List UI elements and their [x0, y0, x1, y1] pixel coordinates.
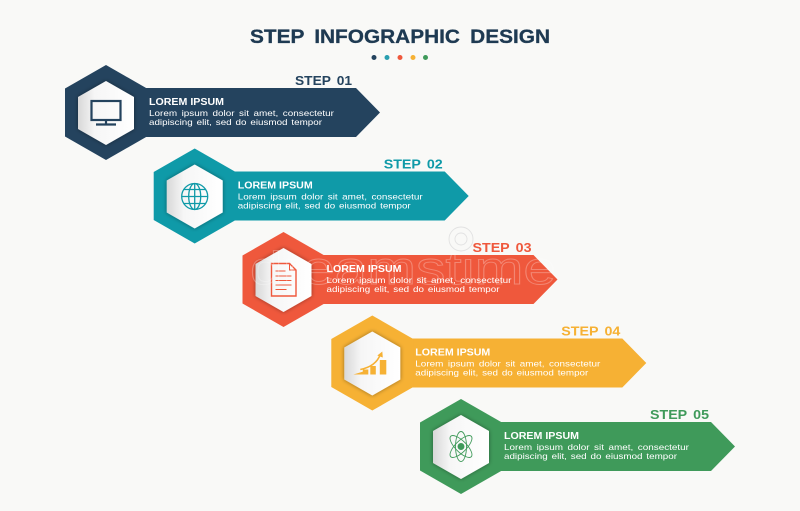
icon: growth chart: [353, 352, 386, 374]
step 5 heading: LOREM IPSUM: [504, 430, 579, 442]
step 2 body: Lorem ipsum dolor sit amet, consectetur: [238, 192, 423, 202]
step 4 banner: [406, 338, 646, 388]
step 4 body: Lorem ipsum dolor sit amet, consectetur: [415, 358, 600, 368]
step 3 body: [326, 275, 512, 294]
step 3 banner: [318, 255, 558, 304]
step 3 heading: LOREM IPSUM: [326, 263, 402, 275]
step 1 body: [149, 108, 334, 127]
step 2 inner hexagon: [167, 164, 223, 228]
step 4 inner hexagon: [344, 332, 400, 396]
step 5 outer hexagon: [420, 399, 502, 494]
step 2 body: adipiscing elit, sed do eiusmod tempor: [238, 200, 411, 210]
step 1 body: adipiscing elit, sed do eiusmod tempor: [149, 117, 322, 127]
step 1 heading: LOREM IPSUM: [149, 96, 224, 108]
step 5 body: [504, 442, 689, 461]
step 1 outer hexagon: [65, 65, 147, 160]
step 4: [331, 316, 646, 410]
step 5 label: STEP 05: [650, 408, 709, 422]
icon: globe: [182, 184, 208, 210]
step 1 body: Lorem ipsum dolor sit amet, consectetur: [149, 108, 334, 118]
title dots: [372, 55, 428, 60]
step 4 label: STEP 04: [561, 324, 620, 338]
step 1: [65, 65, 380, 160]
step 5 body: adipiscing elit, sed do eiusmod tempor: [504, 451, 677, 461]
step 1 banner: [140, 88, 380, 137]
step 3 outer hexagon: [242, 232, 324, 327]
step 2: [154, 148, 469, 244]
step 2 banner: [229, 172, 469, 220]
step 1 label: STEP 01: [295, 74, 352, 88]
step 2 body: [238, 192, 423, 210]
step 4 heading: LOREM IPSUM: [415, 346, 491, 358]
step 5 body: Lorem ipsum dolor sit amet, consectetur: [504, 442, 689, 452]
step 3 inner hexagon: [256, 248, 312, 312]
icon: document: [272, 264, 296, 296]
icon: atom: [447, 432, 475, 462]
step 3: [242, 232, 558, 327]
watermark: dreamstime: [250, 242, 556, 294]
step 5 banner: [495, 422, 735, 471]
step 2 label: STEP 02: [384, 158, 443, 172]
step 2 outer hexagon: [154, 148, 236, 244]
step 4 body: [415, 358, 600, 378]
step 2 heading: LOREM IPSUM: [238, 180, 313, 192]
title: STEP INFOGRAPHIC DESIGN: [250, 27, 550, 48]
step 4 body: adipiscing elit, sed do eiusmod tempor: [415, 368, 588, 378]
step 3 body: Lorem ipsum dolor sit amet, consectetur: [326, 275, 512, 285]
step 5: [420, 399, 735, 494]
step 3 body: adipiscing elit, sed do eiusmod tempor: [326, 284, 500, 294]
step 3 label: STEP 03: [472, 241, 532, 255]
watermark: [250, 227, 556, 294]
icon: monitor: [92, 101, 120, 124]
step 5 inner hexagon: [433, 415, 489, 479]
step 4 outer hexagon: [331, 316, 413, 410]
step 1 inner hexagon: [78, 81, 134, 145]
